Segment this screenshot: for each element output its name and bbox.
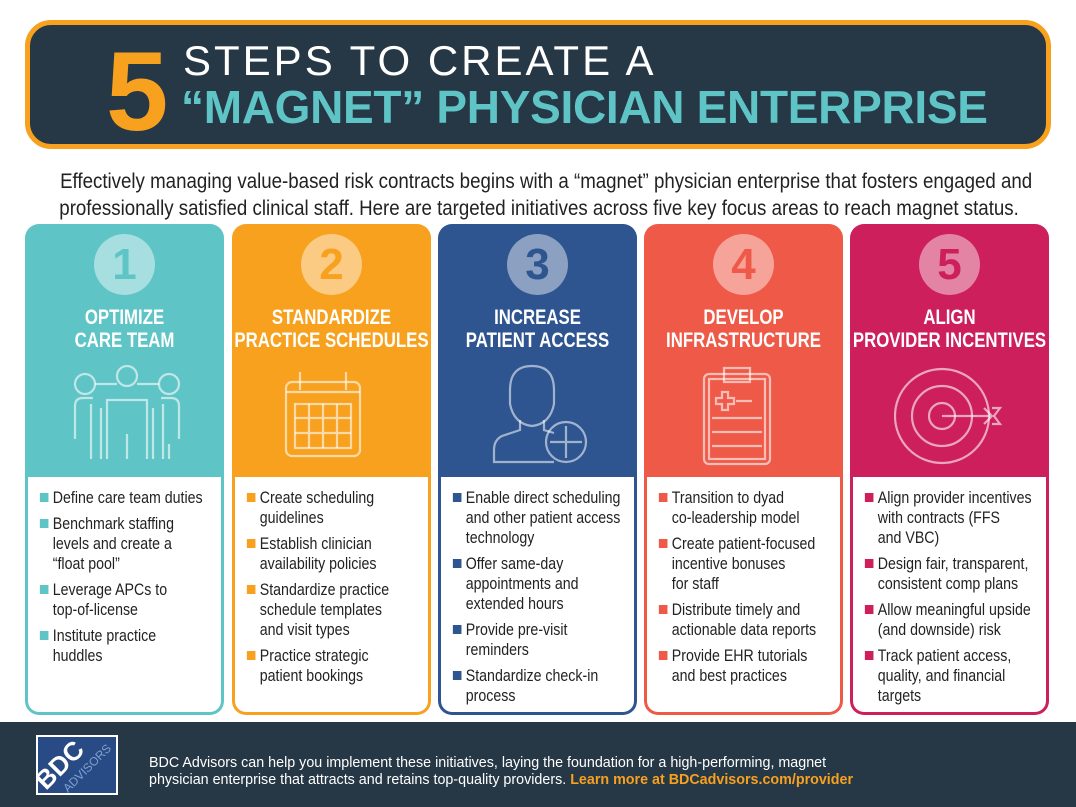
number 1: 1	[112, 240, 137, 289]
list 4: for staff	[672, 575, 719, 593]
icon: calendar	[284, 372, 362, 458]
list 4: incentive bonuses	[672, 555, 785, 573]
list 5: with contracts (FFS	[878, 509, 1000, 527]
list 4: co-leadership model	[672, 509, 800, 527]
list 2	[235, 477, 428, 712]
list 4	[647, 477, 840, 712]
list 3: appointments and	[466, 575, 579, 593]
footer text: BDC Advisors can help you implement these initiatives, laying the foundation for a high-performing, magnet	[149, 755, 826, 771]
panel: step 5	[850, 224, 1049, 715]
list 5: quality, and financial	[878, 667, 1005, 685]
list 2: patient bookings	[260, 667, 363, 685]
list 3	[441, 477, 634, 712]
intro text: Effectively managing value-based risk contracts begins with a “magnet” physician enterprise that fosters engaged and	[60, 170, 1032, 193]
list 5: Align provider incentives	[878, 489, 1032, 507]
list 1: Define care team duties	[53, 489, 203, 507]
list 5: (and downside) risk	[878, 621, 1001, 639]
footer	[0, 722, 1076, 807]
icon: team	[74, 364, 180, 459]
heading 1	[75, 306, 174, 352]
list 5: Track patient access,	[878, 647, 1011, 665]
list 1: Leverage APCs to	[53, 581, 167, 599]
list 5: Allow meaningful upside	[878, 601, 1031, 619]
heading 5: ALIGN	[923, 306, 976, 329]
list 1: levels and create a	[53, 535, 172, 553]
list 3: and other patient access	[466, 509, 620, 527]
list 4: Provide EHR tutorials	[672, 647, 807, 665]
list 4: Distribute timely and	[672, 601, 800, 619]
number 2	[301, 234, 362, 295]
list 3: process	[466, 687, 515, 705]
heading 2	[234, 306, 429, 352]
intro text: professionally satisfied clinical staff. Here are targeted initiatives across five key focus areas to reach magnet status.	[59, 197, 1019, 220]
number 4	[713, 234, 774, 295]
list 3: reminders	[466, 641, 529, 659]
header banner	[25, 20, 1051, 149]
logo: BDC Advisors: ADVISORS	[60, 741, 114, 795]
footer text	[149, 755, 853, 788]
number 3	[507, 234, 568, 295]
list 3: Enable direct scheduling	[466, 489, 620, 507]
list 2: Establish clinician	[260, 535, 372, 553]
number 1	[94, 234, 155, 295]
heading 5	[853, 306, 1046, 352]
list 3: extended hours	[466, 595, 564, 613]
list 3: Provide pre-visit	[466, 621, 567, 639]
panel: step 4	[644, 224, 843, 715]
list 5: targets	[878, 687, 921, 705]
heading 1: OPTIMIZE	[85, 306, 164, 329]
icon: clipboard	[702, 366, 772, 466]
list 5: and VBC)	[878, 529, 939, 547]
list 5: Design fair, transparent,	[878, 555, 1028, 573]
heading 5: PROVIDER INCENTIVES	[853, 329, 1046, 352]
list 3: Offer same-day	[466, 555, 563, 573]
list 2: schedule templates	[260, 601, 382, 619]
list 1: top-of-license	[53, 601, 138, 619]
heading 4	[666, 306, 821, 352]
footer text: physician enterprise that attracts and retains top-quality providers. Learn more at BDCadvisors.com/provider	[149, 772, 853, 788]
list 5: consistent comp plans	[878, 575, 1018, 593]
panel: step 1	[25, 224, 224, 715]
list 1: huddles	[53, 647, 102, 665]
list 2: guidelines	[260, 509, 324, 527]
list 2: Practice strategic	[260, 647, 369, 665]
list 1: Institute practice	[53, 627, 156, 645]
number 5: 5	[937, 240, 962, 289]
heading 2: PRACTICE SCHEDULES	[234, 329, 429, 352]
list 1	[28, 477, 221, 712]
list 5	[853, 477, 1046, 712]
heading 4: INFRASTRUCTURE	[666, 329, 821, 352]
list 4: and best practices	[672, 667, 787, 685]
list 1: Benchmark staffing	[53, 515, 174, 533]
number 4: 4	[731, 240, 756, 289]
list 2: availability policies	[260, 555, 376, 573]
list 3: technology	[466, 529, 534, 547]
intro text	[59, 170, 1032, 220]
panel: step 2	[232, 224, 431, 715]
heading 4: DEVELOP	[703, 306, 784, 329]
heading 3: PATIENT ACCESS	[466, 329, 609, 352]
logo: BDC Advisors	[36, 735, 118, 795]
list 3: Standardize check-in	[466, 667, 598, 685]
icon: person plus	[492, 364, 588, 464]
number 2: 2	[319, 240, 344, 289]
number 5	[919, 234, 980, 295]
list 4: Create patient-focused	[672, 535, 815, 553]
heading 3	[466, 306, 609, 352]
heading 1: CARE TEAM	[75, 329, 174, 352]
list 2: Standardize practice	[260, 581, 389, 599]
title line 2: “MAGNET” PHYSICIAN ENTERPRISE	[181, 81, 988, 133]
title number 5: 5	[106, 29, 166, 154]
number 3: 3	[525, 240, 550, 289]
list 4: Transition to dyad	[672, 489, 784, 507]
heading 2: STANDARDIZE	[272, 306, 391, 329]
icon: target	[894, 368, 1002, 464]
list 2: Create scheduling	[260, 489, 374, 507]
list 4: actionable data reports	[672, 621, 816, 639]
list 2: and visit types	[260, 621, 350, 639]
panel: step 3	[438, 224, 637, 715]
heading 3: INCREASE	[494, 306, 581, 329]
list 1: “float pool”	[53, 555, 120, 573]
title line 1: STEPS TO CREATE A	[183, 37, 656, 84]
